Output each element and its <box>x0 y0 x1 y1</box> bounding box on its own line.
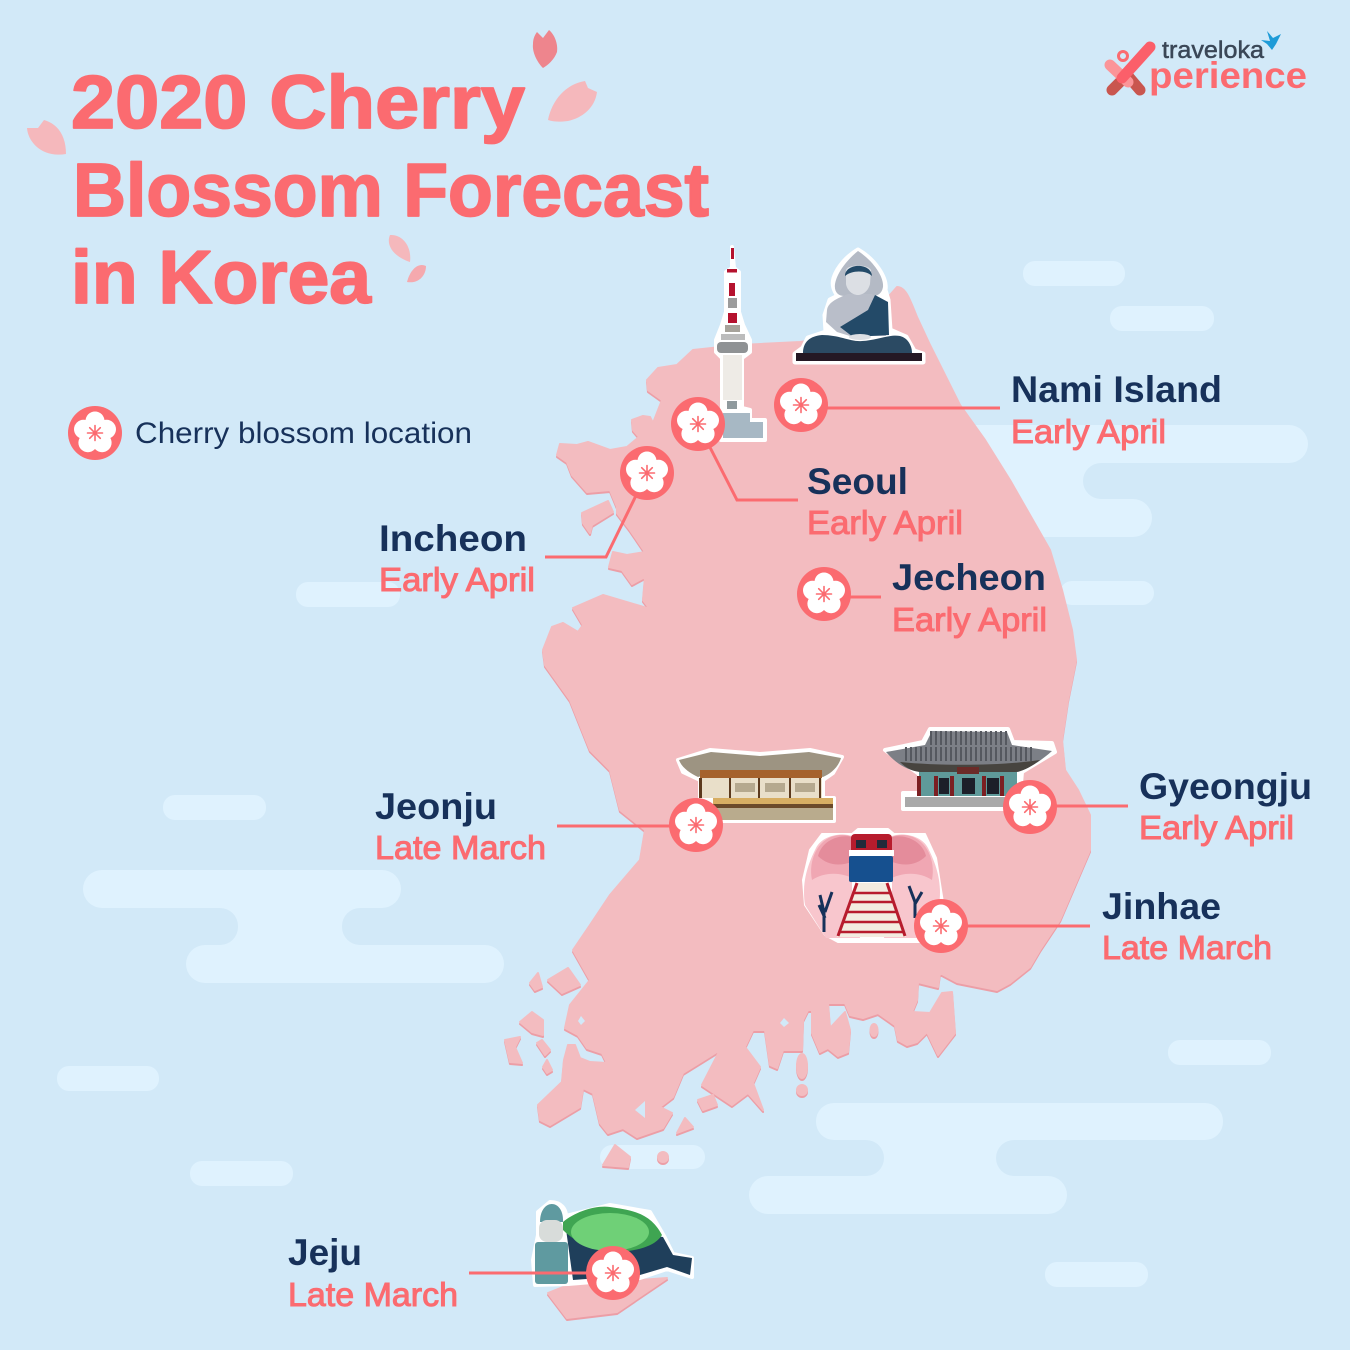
title <box>71 60 709 319</box>
landmark: N Seoul Tower <box>716 247 765 440</box>
map inlets <box>578 1016 789 1118</box>
Jeju island <box>548 1278 667 1318</box>
map of South Korea <box>505 287 1090 1318</box>
callout: Nami Island: Nami Island <box>1011 369 1222 410</box>
landmark: Jinhae train and cherry trees <box>803 829 945 942</box>
title: Blossom Forecast <box>73 148 709 232</box>
legend <box>68 406 472 460</box>
decorative falling petals <box>27 30 597 282</box>
callout: Jecheon: Early April <box>892 601 1047 638</box>
callout: Jinhae: Late March <box>1102 929 1272 966</box>
title: 2020 Cherry <box>71 60 525 144</box>
callout: Jeonju <box>375 786 723 866</box>
callout: Incheon <box>379 446 674 598</box>
callout: Jeju: Jeju <box>288 1232 362 1273</box>
callout: Nami Island <box>774 369 1222 450</box>
landmark: Jeonju hanok <box>678 750 842 821</box>
callout: Incheon: Early April <box>379 561 535 598</box>
callout: Seoul: Seoul <box>807 461 908 502</box>
callout: Jinhae <box>914 886 1272 966</box>
logo: Traveloka Xperience: perience <box>1149 55 1307 96</box>
callout: Jeju <box>288 1232 640 1313</box>
callout: Nami Island: Early April <box>1011 413 1166 450</box>
callout: Jecheon <box>797 557 1047 638</box>
icon: X mark <box>1110 47 1150 90</box>
callout: Jeonju: Late March <box>375 829 546 866</box>
mainland <box>538 287 1090 1137</box>
logo: Traveloka Xperience <box>1110 31 1307 96</box>
callout: Gyeongju: Early April <box>1139 809 1294 846</box>
callout: Jinhae: Jinhae <box>1102 886 1221 927</box>
callout: Incheon: Incheon <box>379 518 527 559</box>
callout: Jeonju: Jeonju <box>375 786 497 827</box>
callout: Seoul: Early April <box>807 504 963 541</box>
callout: Seoul <box>671 397 963 541</box>
background clouds <box>57 261 1308 1287</box>
callout: Jeju: Late March <box>288 1276 458 1313</box>
legend: Cherry blossom location <box>135 417 472 450</box>
icon: blue bird <box>1261 31 1281 50</box>
callout: Gyeongju: Gyeongju <box>1139 766 1312 807</box>
landmark: Jeju crater and stone statue <box>533 1202 692 1285</box>
callout: Jecheon: Jecheon <box>892 557 1046 598</box>
callout: Gyeongju <box>1003 766 1312 846</box>
landmark: Gyeongju temple <box>885 729 1055 809</box>
title: in Korea <box>71 235 372 319</box>
landmark: Buddha statue <box>795 250 923 362</box>
coastal islands <box>505 501 878 1167</box>
wordmark: traveloka <box>1162 37 1265 64</box>
